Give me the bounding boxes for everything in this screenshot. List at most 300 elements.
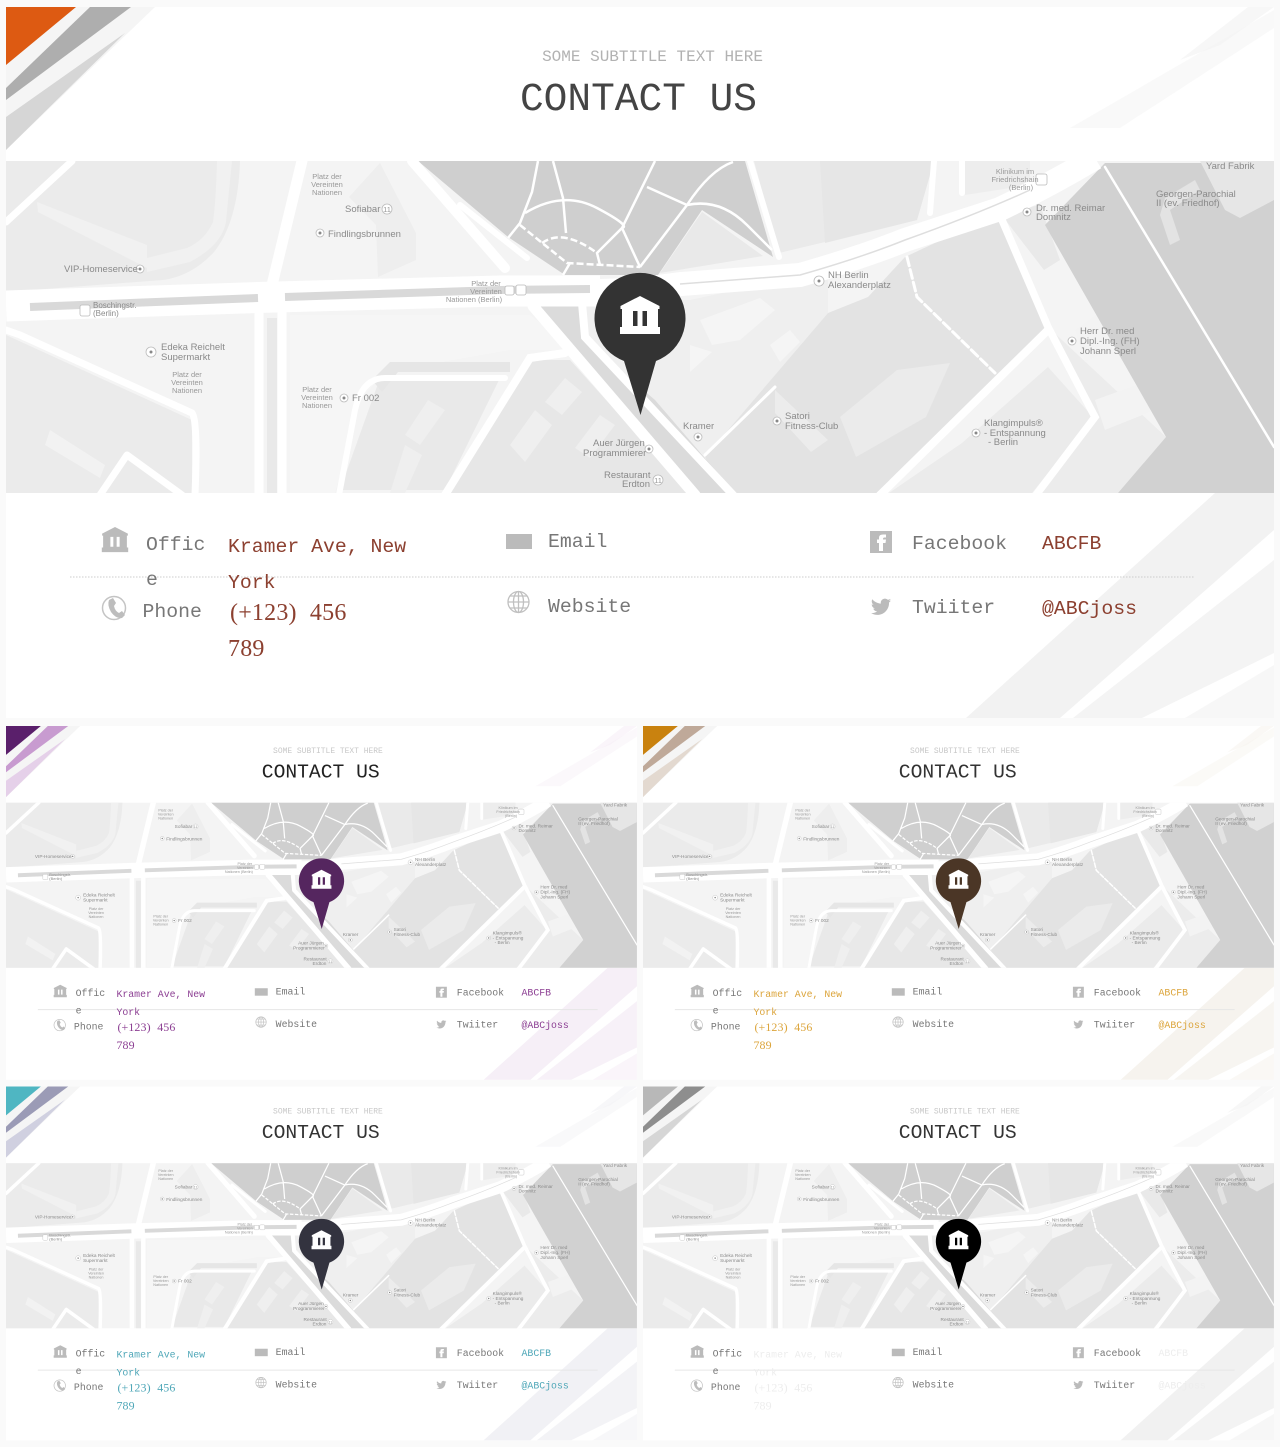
map: Vereinten	[790, 1279, 806, 1283]
map: (Berlin)	[686, 876, 700, 881]
map: Platz der	[158, 1169, 173, 1173]
map: Erdton	[313, 1321, 327, 1327]
map: Klinikum im	[996, 167, 1034, 176]
map: 11	[965, 960, 969, 964]
map: Platz der	[875, 1222, 889, 1226]
map: Edeka Reichelt	[83, 1254, 115, 1259]
contact details: (+123) 456	[117, 1020, 175, 1034]
map: Domnitz	[1156, 1188, 1173, 1194]
contact details: Email	[913, 1347, 942, 1358]
contact details: 789	[753, 1398, 772, 1412]
contact details: ABCFB	[1159, 988, 1188, 999]
map: Nationen	[795, 817, 810, 821]
map: Kramer	[980, 932, 996, 938]
map: VIP-Homeservice	[35, 854, 72, 860]
map: Nationen	[89, 1276, 104, 1280]
slide: teal	[6, 1086, 637, 1440]
map: 11	[328, 960, 332, 964]
map: Nationen	[795, 1177, 810, 1181]
contact details: Twiiter	[457, 1380, 498, 1391]
map: Yard Fabrik	[1240, 1163, 1265, 1169]
map: Nationen	[302, 401, 332, 410]
map: Herr Dr. med	[1080, 326, 1134, 337]
map: - Entspannung	[493, 935, 524, 941]
map: (Berlin)	[49, 876, 63, 881]
map: Satori	[785, 411, 810, 422]
map: Platz der	[172, 370, 202, 379]
map: NH Berlin	[415, 858, 435, 863]
subtitle: SOME SUBTITLE TEXT HERE	[542, 48, 763, 66]
map: Nationen	[158, 1177, 173, 1181]
map: Dr. med. Reimar	[1156, 1185, 1190, 1190]
map: Auer Jürgen	[935, 1302, 961, 1307]
map: (Berlin)	[686, 1236, 700, 1241]
map: Fr 002	[815, 1279, 829, 1285]
map: Johann Sperl	[1177, 895, 1205, 901]
map: Dipl.-Ing. (FH)	[540, 890, 570, 896]
map: Edeka Reichelt	[720, 894, 752, 899]
map pin	[595, 273, 686, 415]
contact details: York	[116, 1007, 140, 1018]
background streaks	[484, 726, 637, 1080]
map: Platz der	[238, 862, 252, 866]
map pin	[936, 1219, 981, 1290]
map: Klangimpuls®	[1130, 1292, 1159, 1297]
contact details: Facebook	[1094, 988, 1141, 999]
map: NH Berlin	[828, 270, 869, 281]
map: Supermarkt	[720, 898, 745, 904]
map: - Berlin	[495, 940, 510, 946]
map: Vereinten	[470, 287, 502, 296]
contact details: Facebook	[912, 533, 1007, 555]
map: Vereinten	[795, 813, 811, 817]
map: Klangimpuls®	[984, 418, 1043, 429]
slide: monochrome	[643, 1086, 1274, 1440]
map: VIP-Homeservice	[672, 1214, 709, 1220]
background streaks	[966, 7, 1274, 718]
contact details: e	[76, 1366, 82, 1377]
contact details: ABCFB	[1042, 533, 1101, 555]
map: (Berlin)	[1009, 183, 1034, 192]
map: Vereinten	[153, 919, 169, 923]
map: - Entspannung	[1130, 935, 1161, 941]
map: VIP-Homeservice	[64, 264, 138, 275]
map: Friedrichshain	[991, 175, 1039, 184]
contact details: ABCFB	[522, 988, 551, 999]
contact details: Kramer Ave, New	[116, 989, 205, 1000]
map: Yard Fabrik	[603, 1163, 628, 1169]
map: Vereinten	[237, 866, 253, 870]
map: Fr 002	[815, 918, 829, 924]
map	[6, 1162, 637, 1330]
contact details: e	[713, 1006, 719, 1017]
map: (Berlin)	[1142, 814, 1154, 818]
map: Fr 002	[352, 393, 379, 404]
map: Vereinten	[88, 911, 104, 915]
map: 11	[383, 205, 391, 214]
map: Platz der	[312, 172, 342, 181]
contact details: Kramer Ave, New	[116, 1350, 205, 1361]
map: Sofiabar	[812, 1185, 830, 1191]
corner decoration	[6, 1086, 80, 1158]
map: Auer Jürgen	[935, 941, 961, 946]
map: Restaurant	[304, 957, 327, 962]
map: Vereinten	[790, 919, 806, 923]
map: Herr Dr. med	[1177, 1246, 1204, 1251]
slide: main orange	[6, 7, 1274, 718]
map: Auer Jürgen	[298, 1302, 324, 1307]
subtitle: SOME SUBTITLE TEXT HERE	[273, 747, 383, 756]
map: VIP-Homeservice	[672, 854, 709, 860]
map: (Berlin)	[505, 1175, 517, 1179]
map pin	[936, 858, 981, 929]
map: Alexanderplatz	[415, 1222, 447, 1228]
map: Satori	[1031, 1289, 1043, 1294]
map: Dipl.-Ing. (FH)	[1177, 890, 1207, 896]
map: Platz der	[790, 915, 805, 919]
map: Herr Dr. med	[540, 886, 567, 891]
map: Edeka Reichelt	[83, 894, 115, 899]
map: 11	[328, 1320, 332, 1324]
map: Auer Jürgen	[593, 438, 645, 449]
map: Dr. med. Reimar	[1036, 203, 1105, 214]
map: Sofiabar	[175, 824, 193, 830]
map: Georgen-Parochial	[1215, 1178, 1255, 1183]
contact details: (+123) 456	[117, 1381, 175, 1395]
title: CONTACT US	[520, 77, 757, 122]
map: Vereinten	[795, 1173, 811, 1177]
contact details: Email	[913, 987, 942, 998]
map: Findlingsbrunnen	[166, 836, 203, 842]
map: - Entspannung	[1130, 1296, 1161, 1302]
contact details: Offic	[146, 534, 205, 556]
map: Vereinten	[874, 866, 890, 870]
map: Alexanderplatz	[1052, 1222, 1084, 1228]
contact details: Website	[276, 1380, 317, 1391]
map: Nationen	[158, 817, 173, 821]
contact details: Offic	[76, 1349, 105, 1360]
map	[6, 158, 1274, 497]
contact details: Offic	[713, 988, 742, 999]
map: Restaurant	[941, 1318, 964, 1323]
map: Kramer	[683, 421, 714, 432]
map: (Berlin)	[93, 309, 119, 318]
map: Erdton	[313, 961, 327, 967]
map: Findlingsbrunnen	[166, 1197, 203, 1203]
map: Nationen	[172, 386, 202, 395]
map: Klinikum im	[499, 1167, 518, 1171]
map: Vereinten	[237, 1226, 253, 1230]
map: NH Berlin	[415, 1218, 435, 1223]
map: Nationen (Berlin)	[225, 870, 253, 874]
map: 11	[965, 1320, 969, 1324]
map: Johann Sperl	[1177, 1255, 1205, 1261]
map: Kramer	[980, 1292, 996, 1298]
map: Dr. med. Reimar	[519, 1185, 553, 1190]
map: Nationen (Berlin)	[862, 1230, 890, 1234]
map: Vereinten	[88, 1272, 104, 1276]
map: Dipl.-Ing. (FH)	[1080, 336, 1140, 347]
map: Erdton	[950, 961, 964, 967]
map: Herr Dr. med	[540, 1246, 567, 1251]
map: Klinikum im	[499, 806, 518, 810]
map: Johann Sperl	[540, 1255, 568, 1261]
map: (Berlin)	[505, 814, 517, 818]
slide: purple	[6, 726, 637, 1080]
map: Fitness-Club	[1031, 932, 1057, 938]
contact details: Phone	[711, 1022, 741, 1033]
corner decoration	[643, 1086, 717, 1158]
contact details: ABCFB	[522, 1348, 551, 1359]
map: Georgen-Parochial	[1215, 818, 1255, 823]
map: Dr. med. Reimar	[1156, 825, 1190, 830]
slide: amber	[643, 726, 1274, 1080]
map: Klangimpuls®	[493, 931, 522, 936]
map: Dipl.-Ing. (FH)	[540, 1250, 570, 1256]
map: - Berlin	[1132, 1300, 1147, 1306]
contact details: York	[228, 572, 275, 594]
map: Fr 002	[178, 1279, 192, 1285]
map: (Berlin)	[1142, 1175, 1154, 1179]
map: Yard Fabrik	[1206, 161, 1255, 172]
map: Satori	[394, 928, 406, 933]
map: 11	[831, 825, 835, 829]
contact details: Email	[548, 531, 607, 553]
background streaks	[1121, 726, 1274, 1080]
map: Restaurant	[304, 1318, 327, 1323]
map: Vereinten	[311, 180, 343, 189]
contact details: York	[116, 1368, 140, 1379]
map: Fitness-Club	[394, 1292, 420, 1298]
contact details: ABCFB	[1159, 1348, 1188, 1359]
map: Platz der	[153, 915, 168, 919]
map: Erdton	[622, 479, 650, 490]
contact details: Kramer Ave, New	[753, 1350, 842, 1361]
map: VIP-Homeservice	[35, 1214, 72, 1220]
map: 11	[194, 825, 198, 829]
map: 11	[831, 1186, 835, 1190]
map: Vereinten	[158, 1173, 174, 1177]
title: CONTACT US	[899, 761, 1017, 783]
map: Kramer	[343, 1292, 359, 1298]
contact details: York	[753, 1368, 777, 1379]
contact details: Phone	[74, 1022, 104, 1033]
map: Supermarkt	[720, 1258, 745, 1264]
subtitle: SOME SUBTITLE TEXT HERE	[273, 1107, 383, 1116]
map: Klinikum im	[1136, 806, 1155, 810]
map: Nationen	[790, 1283, 805, 1287]
contact details	[675, 1345, 1235, 1412]
map: Fitness-Club	[394, 932, 420, 938]
contact details: Website	[276, 1019, 317, 1030]
contact details	[38, 1345, 598, 1412]
map: Boschingstr.	[686, 1232, 708, 1237]
map: Vereinten	[874, 1226, 890, 1230]
background streaks	[484, 1086, 637, 1440]
contact details: @ABCjoss	[1042, 598, 1137, 620]
map: Alexanderplatz	[828, 280, 891, 291]
map: Edeka Reichelt	[720, 1254, 752, 1259]
map: II (ev. Friedhof)	[578, 821, 610, 827]
map: Vereinten	[171, 378, 203, 387]
contact details: Twiiter	[912, 597, 995, 619]
map: Klinikum im	[1136, 1167, 1155, 1171]
map: Georgen-Parochial	[1156, 189, 1236, 200]
map: Alexanderplatz	[415, 862, 447, 868]
map: Satori	[394, 1289, 406, 1294]
map: NH Berlin	[1052, 858, 1072, 863]
map: Sofiabar	[812, 824, 830, 830]
map: Platz der	[471, 279, 501, 288]
map: Klangimpuls®	[493, 1292, 522, 1297]
map: II (ev. Friedhof)	[1156, 198, 1220, 209]
contact details: @ABCjoss	[1159, 1381, 1206, 1392]
map: Friedrichshain	[496, 1171, 520, 1175]
contact details: Website	[548, 596, 631, 618]
contact details: York	[753, 1007, 777, 1018]
map	[643, 1162, 1274, 1330]
contact details: Website	[913, 1380, 954, 1391]
corner decoration	[6, 7, 155, 150]
contact details: e	[713, 1366, 719, 1377]
map: Friedrichshain	[1133, 1171, 1157, 1175]
subtitle: SOME SUBTITLE TEXT HERE	[910, 747, 1020, 756]
map: Vereinten	[725, 911, 741, 915]
map: Nationen	[790, 923, 805, 927]
map: Domnitz	[1156, 828, 1173, 834]
contact details: 789	[116, 1038, 135, 1052]
map: Boschingstr.	[49, 872, 71, 877]
map: Dr. med. Reimar	[519, 825, 553, 830]
map: Johann Sperl	[540, 895, 568, 901]
map: Platz der	[238, 1222, 252, 1226]
map: Findlingsbrunnen	[803, 1197, 840, 1203]
map: Domnitz	[519, 828, 536, 834]
contact details: @ABCjoss	[1159, 1020, 1206, 1031]
map: Vereinten	[158, 813, 174, 817]
map: Programmierer	[583, 448, 646, 459]
map: Alexanderplatz	[1052, 862, 1084, 868]
contact details: Offic	[713, 1349, 742, 1360]
map: Programmierer	[293, 945, 325, 951]
map: Programmierer	[293, 1306, 325, 1312]
contact details: 789	[228, 636, 265, 662]
map: Platz der	[158, 809, 173, 813]
contact details: 789	[753, 1038, 772, 1052]
contact details: e	[76, 1006, 82, 1017]
map: Findlingsbrunnen	[803, 836, 840, 842]
map: Satori	[1031, 928, 1043, 933]
map: Edeka Reichelt	[161, 342, 225, 353]
map: Vereinten	[301, 393, 333, 402]
map: Fitness-Club	[1031, 1292, 1057, 1298]
corner decoration	[6, 726, 80, 797]
map: Platz der	[795, 809, 810, 813]
map: Yard Fabrik	[603, 803, 628, 809]
map: Georgen-Parochial	[578, 1178, 618, 1183]
map: Friedrichshain	[496, 810, 520, 814]
map: Nationen	[726, 1276, 741, 1280]
map: - Berlin	[1132, 940, 1147, 946]
contact details	[70, 527, 1195, 662]
map: Nationen	[153, 1283, 168, 1287]
contact details: (+123) 456	[754, 1020, 812, 1034]
map: Supermarkt	[83, 1258, 108, 1264]
map: Erdton	[950, 1321, 964, 1327]
map: Boschingstr.	[93, 301, 137, 310]
contact details: @ABCjoss	[522, 1020, 569, 1031]
title: CONTACT US	[262, 1122, 380, 1144]
contact details	[675, 985, 1235, 1052]
map: Domnitz	[1036, 212, 1071, 223]
map: Platz der	[153, 1275, 168, 1279]
corner decoration	[643, 726, 717, 797]
map: Boschingstr.	[686, 872, 708, 877]
contact details: Twiiter	[1094, 1380, 1135, 1391]
map: Platz der	[726, 907, 740, 911]
subtitle: SOME SUBTITLE TEXT HERE	[910, 1107, 1020, 1116]
map: - Berlin	[988, 437, 1018, 448]
map pin	[299, 858, 344, 929]
map: Auer Jürgen	[298, 941, 324, 946]
map: II (ev. Friedhof)	[578, 1182, 610, 1188]
title: CONTACT US	[262, 761, 380, 783]
map: Herr Dr. med	[1177, 886, 1204, 891]
map: (Berlin)	[49, 1236, 63, 1241]
contact details: (+123) 456	[754, 1381, 812, 1395]
map: Dipl.-Ing. (FH)	[1177, 1250, 1207, 1256]
map: Georgen-Parochial	[578, 818, 618, 823]
map: Platz der	[875, 862, 889, 866]
contact details: Facebook	[457, 988, 504, 999]
map: Kramer	[343, 932, 359, 938]
map: Restaurant	[604, 470, 650, 481]
map: Boschingstr.	[49, 1232, 71, 1237]
map: Nationen (Berlin)	[225, 1230, 253, 1234]
contact details: Twiiter	[457, 1020, 498, 1031]
contact details: Phone	[74, 1382, 104, 1393]
map: Nationen	[153, 923, 168, 927]
background streaks	[1121, 1086, 1274, 1440]
map: II (ev. Friedhof)	[1215, 821, 1247, 827]
map: Vereinten	[153, 1279, 169, 1283]
contact details: Kramer Ave, New	[753, 989, 842, 1000]
contact details: Twiiter	[1094, 1020, 1135, 1031]
map: 11	[654, 476, 662, 485]
contact details: Website	[913, 1019, 954, 1030]
contact details: (+123) 456	[230, 600, 347, 626]
map: Programmierer	[930, 1306, 962, 1312]
contact details: Phone	[711, 1382, 741, 1393]
contact details: Kramer Ave, New	[228, 536, 406, 558]
contact details: 789	[116, 1398, 135, 1412]
map: Platz der	[790, 1275, 805, 1279]
map: Programmierer	[930, 945, 962, 951]
map: 11	[194, 1186, 198, 1190]
map: - Entspannung	[493, 1296, 524, 1302]
map: Yard Fabrik	[1240, 803, 1265, 809]
map: Findlingsbrunnen	[328, 229, 401, 240]
contact details: e	[146, 569, 158, 591]
contact details: Email	[276, 1347, 305, 1358]
map: Johann Sperl	[1080, 346, 1136, 357]
map: Nationen (Berlin)	[446, 295, 503, 304]
map: II (ev. Friedhof)	[1215, 1182, 1247, 1188]
map: Domnitz	[519, 1188, 536, 1194]
map: Fr 002	[178, 918, 192, 924]
map: Platz der	[89, 907, 103, 911]
contact details: Phone	[142, 601, 202, 623]
